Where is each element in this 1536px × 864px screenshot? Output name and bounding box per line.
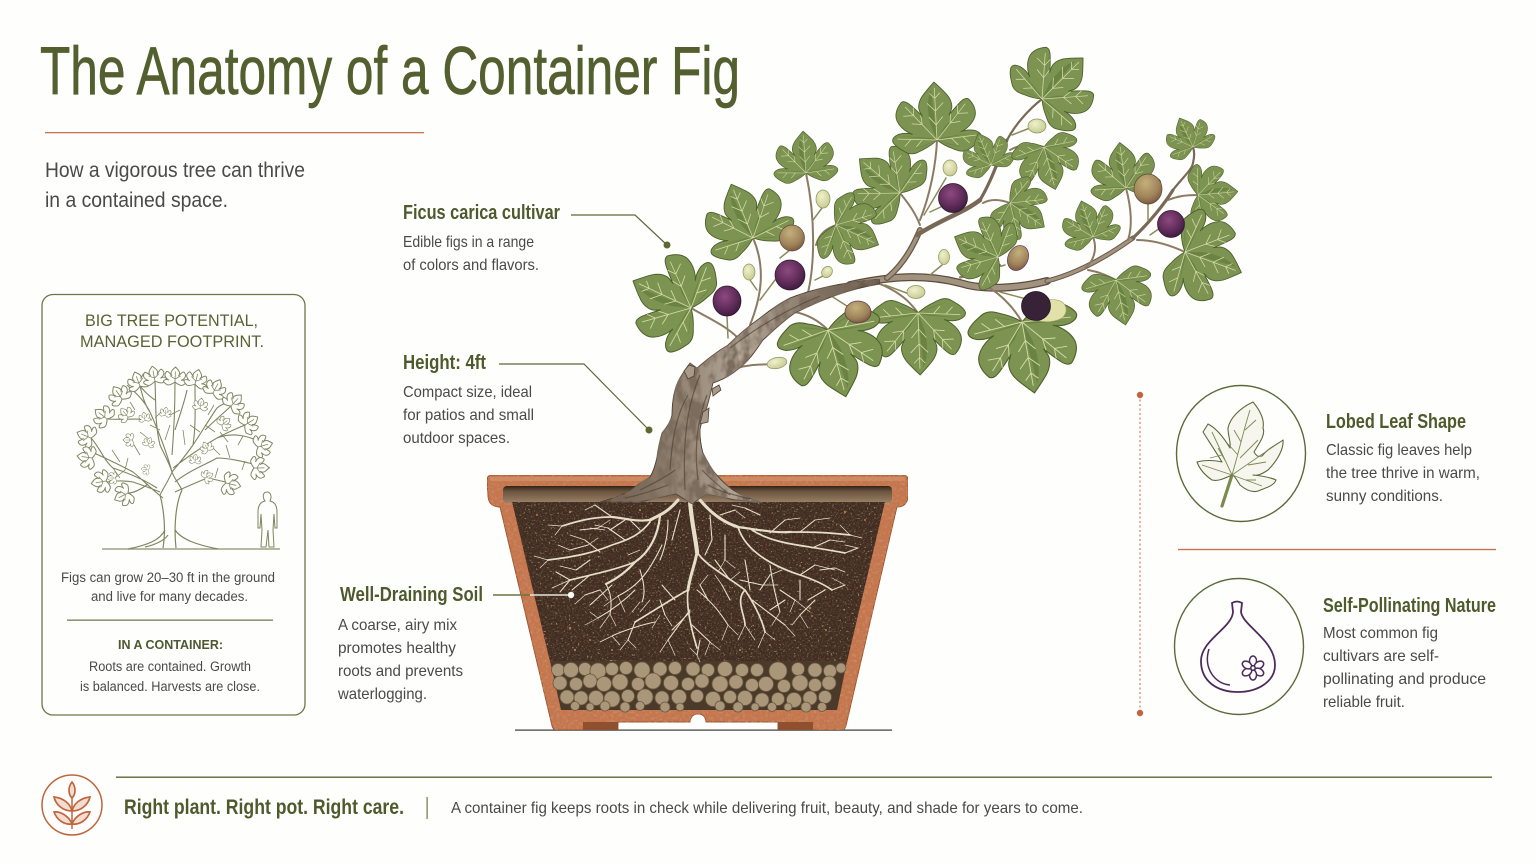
panel heading (80, 311, 264, 351)
feature text (1326, 442, 1480, 505)
callout text: waterlogging. (337, 686, 427, 703)
upper branches (691, 99, 1198, 368)
panel heading: BIG TREE POTENTIAL, (85, 311, 258, 330)
callout text (337, 617, 463, 703)
icon: line drawing of a large tree with person for scale (73, 364, 280, 549)
ground line (515, 730, 892, 731)
icon: fig with flower in circle (1174, 578, 1304, 714)
feature: self-pollinating nature (1174, 578, 1496, 714)
panel text: in the ground: Figs can grow 20–30 ft in the ground (61, 570, 275, 585)
icon: sprout in circle (42, 775, 102, 835)
panel text: in the ground (61, 570, 275, 604)
footer slogan: Right plant. Right pot. Right care. (124, 796, 404, 819)
feature text: sunny conditions. (1326, 488, 1443, 505)
callout text: Compact size, ideal (403, 384, 532, 401)
soil specks (536, 509, 866, 651)
callout text: Edible figs in a range (403, 234, 534, 251)
feature text: Classic fig leaves help (1326, 442, 1472, 459)
callout text: for patios and small (403, 407, 534, 424)
panel text: in a container: is balanced. Harvests are close. (80, 679, 260, 694)
callout: ficus carica cultivar (403, 202, 670, 274)
callout text: of colors and flavors. (403, 257, 539, 274)
leader: well-draining soil (493, 592, 574, 598)
leader line (499, 364, 652, 434)
roots (534, 500, 862, 662)
icon: person silhouette (258, 492, 277, 547)
soil layer (512, 502, 885, 662)
callout text (403, 234, 539, 274)
title: The Anatomy of a Container Fig (40, 33, 740, 109)
subtitle: How a vigorous tree can thrive (45, 159, 305, 182)
feature text: cultivars are self- (1323, 648, 1439, 665)
callout: well-draining soil (337, 584, 483, 703)
terracotta pot (487, 475, 908, 730)
icon: fig leaf in circle (1176, 386, 1306, 522)
subtitle: in a contained space. (45, 189, 228, 212)
footer (42, 775, 1492, 835)
callout text: A coarse, airy mix (338, 617, 457, 634)
feature text: reliable fruit. (1323, 694, 1405, 711)
feature text: Most common fig (1323, 625, 1438, 642)
trunk and main limb (600, 279, 880, 504)
illustration: fig tree in terracotta pot (487, 27, 1257, 731)
feature text: pollinating and produce (1323, 671, 1486, 688)
callout text: outdoor spaces. (403, 430, 510, 447)
footer text: A container fig keeps roots in check while delivering fruit, beauty, and shade for years to come. (451, 800, 1083, 817)
dotted timeline divider (1137, 392, 1143, 716)
callout heading: Well-Draining Soil (340, 584, 483, 606)
callout heading: Ficus carica cultivar (403, 202, 560, 224)
figs (713, 119, 1184, 370)
panel text: in a container: Roots are contained. Growth (89, 659, 251, 674)
gravel drainage layer (550, 661, 847, 712)
soil surface (503, 486, 892, 503)
leaves (612, 27, 1257, 410)
callout text (403, 384, 534, 447)
callout text: roots and prevents (338, 663, 463, 680)
feature heading: Self-Pollinating Nature (1323, 595, 1496, 617)
feature: lobed leaf shape (1176, 386, 1480, 522)
subtitle (45, 159, 305, 212)
panel: big tree potential (42, 294, 305, 715)
callout heading: Height: 4ft (403, 352, 486, 374)
feature heading: Lobed Leaf Shape (1326, 411, 1466, 433)
panel text: in a container (80, 659, 260, 694)
callout text: promotes healthy (338, 640, 456, 657)
feature text (1323, 625, 1486, 711)
feature text: the tree thrive in warm, (1326, 465, 1480, 482)
leader line (571, 215, 670, 248)
panel subheading: IN A CONTAINER: (118, 637, 223, 652)
panel text: in the ground: and live for many decades. (91, 589, 248, 604)
panel heading: MANAGED FOOTPRINT. (80, 332, 264, 351)
callout: height (403, 352, 652, 447)
